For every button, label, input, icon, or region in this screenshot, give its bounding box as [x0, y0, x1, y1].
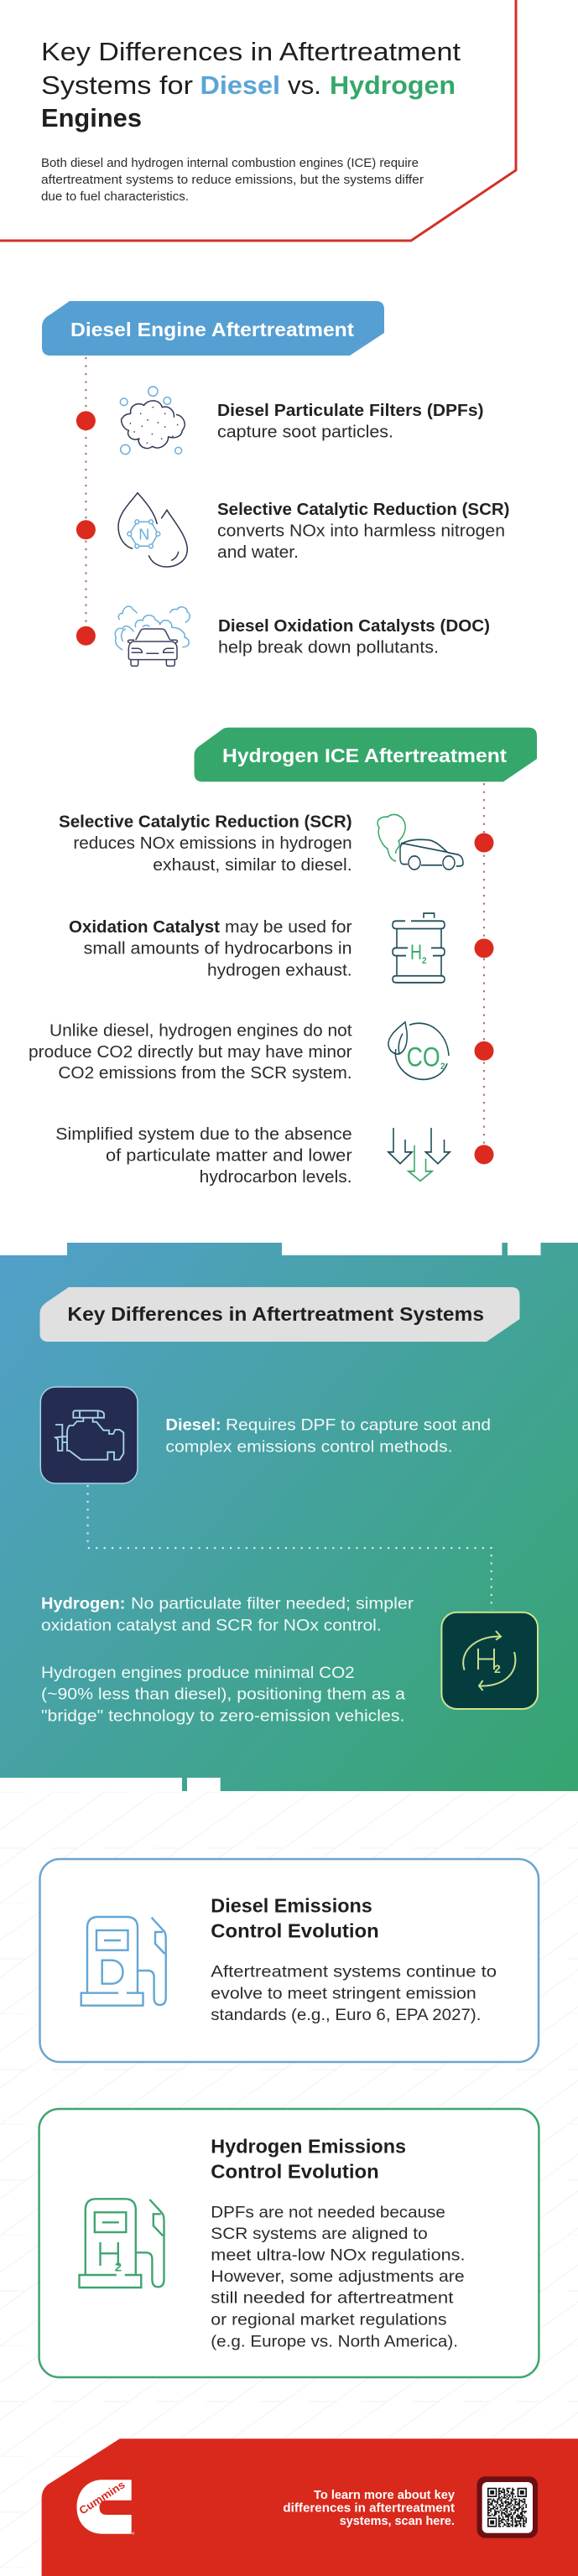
icon: hydrogen fuel pump: 2 [115, 2260, 122, 2274]
diesel item: DPF: capture soot particles. [217, 423, 393, 442]
diesel item: DOC: help break down pollutants. [218, 639, 439, 657]
panel: diesel engine aftertreatment [42, 301, 510, 666]
diesel item: SCR: and water. [217, 543, 299, 562]
hydrogen item: CO2 [29, 1021, 352, 1083]
icon: car with exhaust clouds [115, 606, 190, 666]
hydrogen card outline [39, 2109, 539, 2377]
icon: hydrogen fuel pump [79, 2199, 164, 2288]
diesel card text: Diesel Emissions [211, 1895, 372, 1917]
title: Hydrogen [330, 70, 456, 100]
hydrogen card text: (e.g. Europe vs. North America). [211, 2332, 458, 2350]
red footer background [42, 2438, 578, 2576]
icon: nitrogen water drops [118, 493, 187, 567]
panel: key differences gradient section [0, 1243, 578, 1791]
diesel difference text: complex emissions control methods. [165, 1438, 453, 1457]
icon: hydrogen barrel: H [410, 942, 422, 965]
diesel item: DPF: Diesel Particulate Filters (DPFs) [217, 402, 483, 420]
hydrogen item: CO2: CO2 emissions from the SCR system. [58, 1064, 352, 1083]
diesel timeline [76, 357, 96, 646]
diesel item: DPF [217, 402, 483, 442]
key differences heading banner: Key Differences in Aftertreatment Systems [67, 1303, 484, 1325]
hydrogen difference text: Hydrogen engines produce minimal CO2 [41, 1664, 355, 1682]
title: Engines [41, 103, 142, 132]
diesel item: SCR: Selective Catalytic Reduction (SCR) [217, 501, 510, 519]
icon: car with exhaust smoke [378, 814, 463, 870]
diesel difference text: Requires DPF to capture soot and [226, 1416, 491, 1435]
icon: hydrogen barrel: 2 [422, 955, 427, 966]
title: vs. [288, 70, 321, 100]
icon: Cummins logo [76, 2478, 135, 2536]
diesel card outline [40, 1859, 539, 2062]
QR code [476, 2476, 538, 2538]
hydrogen heading banner: Hydrogen ICE Aftertreatment [222, 745, 507, 766]
title: Diesel [200, 70, 280, 100]
icon: nitrogen water drops: N [138, 527, 149, 543]
diesel heading banner [42, 301, 384, 356]
diesel item: DOC [218, 617, 490, 657]
hydrogen item: SCR: exhaust, similar to diesel. [153, 856, 352, 875]
icon: diesel fuel pump [81, 1917, 166, 2006]
call to action text: systems, scan here. [340, 2514, 455, 2528]
hydrogen card text: still needed for aftertreatment [211, 2289, 454, 2308]
title: Key Differences in Aftertreatment [41, 37, 461, 66]
hydrogen item: CO2: Unlike diesel, hydrogen engines do not [49, 1021, 352, 1040]
diesel card text: Aftertreatment systems continue to [211, 1963, 497, 1981]
call to action text: To learn more about key [314, 2488, 456, 2502]
diesel item: DOC: Diesel Oxidation Catalysts (DOC) [218, 617, 490, 636]
diesel card text: Control Evolution [211, 1920, 379, 1942]
hydrogen difference text: "bridge" technology to zero-emission vehicles. [41, 1706, 404, 1725]
hydrogen item: oxidation catalyst: Oxidation Catalyst [69, 918, 220, 937]
hydrogen item: simplified system: Simplified system due to the absence [55, 1125, 352, 1144]
hydrogen card text: or regional market regulations [211, 2311, 447, 2329]
intro text: Both diesel and hydrogen internal combustion engines (ICE) require [41, 156, 419, 170]
diesel card text: evolve to meet stringent emission [211, 1984, 476, 2002]
header outline [0, 0, 516, 241]
hydrogen item: oxidation catalyst: small amounts of hydrocarbons in [84, 939, 352, 958]
icon: CO2 cycle with leaf: 2 [440, 1062, 445, 1072]
icon: hydrogen cycle badge [441, 1613, 538, 1709]
icon: hydrogen barrel [393, 913, 445, 983]
hydrogen difference text: oxidation catalyst and SCR for NOx control. [41, 1616, 382, 1634]
diesel heading banner: Diesel Engine Aftertreatment [70, 319, 354, 340]
hydrogen card text: Control Evolution [211, 2160, 379, 2182]
hydrogen card text: meet ultra-low NOx regulations. [211, 2246, 466, 2265]
diesel item: SCR: converts NOx into harmless nitrogen [217, 522, 505, 540]
title [41, 37, 461, 132]
icon: engine badge [40, 1387, 138, 1483]
gradient background with notches [0, 1243, 578, 1791]
hydrogen item: SCR: Selective Catalytic Reduction (SCR) [59, 813, 352, 832]
intro text [41, 156, 424, 204]
hydrogen item: CO2: produce CO2 directly but may have minor [29, 1043, 352, 1062]
hydrogen difference text [41, 1594, 414, 1725]
connector dotted line [88, 1485, 492, 1610]
hydrogen card text: SCR systems are aligned to [211, 2225, 428, 2243]
diesel difference text [165, 1416, 491, 1457]
intro text: aftertreatment systems to reduce emissions, but the systems differ [41, 173, 424, 187]
hydrogen item: oxidation catalyst: may be used for [225, 918, 352, 937]
hydrogen item: oxidation catalyst [69, 918, 352, 979]
call to action text [283, 2488, 456, 2528]
title: Systems for [41, 70, 193, 100]
hydrogen card text: Hydrogen Emissions [211, 2136, 406, 2158]
icon: downward arrows [388, 1128, 450, 1181]
hydrogen card text: However, some adjustments are [211, 2267, 465, 2286]
intro text: due to fuel characteristics. [41, 190, 189, 204]
hydrogen difference text: (~90% less than diesel), positioning them as a [41, 1685, 405, 1704]
diesel card text: standards (e.g., Euro 6, EPA 2027). [211, 2006, 481, 2024]
diesel difference text: Diesel: [165, 1416, 221, 1435]
hydrogen item: SCR: reduces NOx emissions in hydrogen [73, 834, 352, 853]
hydrogen item: simplified system: of particulate matter and lower [106, 1147, 352, 1166]
hydrogen item: simplified system [55, 1125, 352, 1187]
panel: diesel emissions control evolution [40, 1859, 539, 2062]
icon: soot cloud [120, 387, 185, 454]
diesel item: SCR [217, 501, 510, 562]
call to action text: differences in aftertreatment [283, 2501, 455, 2516]
hydrogen heading banner [195, 728, 537, 782]
diesel card text [211, 1895, 497, 2024]
hydrogen item: oxidation catalyst: hydrogen exhaust. [207, 961, 352, 979]
icon: Cummins logo: ® [132, 2531, 135, 2536]
icon: CO2 cycle with leaf [388, 1022, 449, 1079]
hydrogen difference text: No particulate filter needed; simpler [131, 1594, 414, 1613]
icon: hydrogen cycle badge: 2 [494, 1662, 501, 1675]
hydrogen difference text: Hydrogen: [41, 1594, 125, 1613]
panel: footer [42, 2438, 578, 2576]
icon: Cummins logo: Cummins [76, 2478, 128, 2517]
panel: hydrogen emissions control evolution [39, 2109, 539, 2377]
icon: CO2 cycle with leaf: CO [407, 1043, 440, 1072]
hydrogen item: simplified system: hydrocarbon levels. [200, 1168, 352, 1187]
hydrogen timeline [475, 783, 493, 1164]
panel: hydrogen ICE aftertreatment [29, 728, 537, 1187]
patterned background lower area [0, 1791, 578, 2576]
hydrogen card text: DPFs are not needed because [211, 2203, 445, 2221]
key differences heading banner [40, 1287, 520, 1342]
hydrogen card text [211, 2136, 466, 2350]
hydrogen item: SCR [59, 813, 352, 875]
